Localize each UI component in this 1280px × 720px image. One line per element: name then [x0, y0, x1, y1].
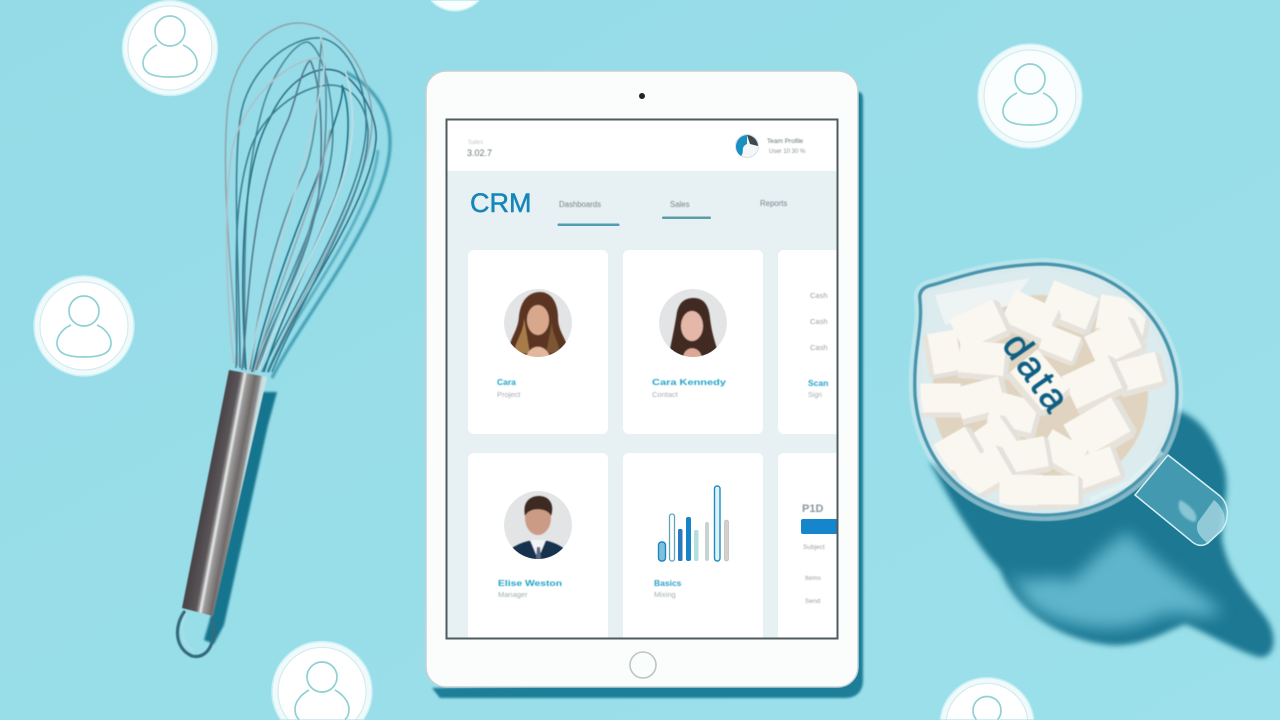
- cup shadow: [930, 410, 1274, 657]
- chart card: [623, 453, 763, 643]
- icon: customer avatar top right: [978, 44, 1082, 148]
- customer card 3: Manager: [498, 590, 528, 599]
- header profile icon: [736, 134, 758, 158]
- side card 2: [778, 453, 836, 638]
- side card 2: Items: [805, 575, 822, 582]
- side card 2: Subject: [803, 544, 825, 551]
- home button: [630, 652, 656, 678]
- cup glass and cubes: [915, 264, 1177, 515]
- measuring cup: [915, 264, 1274, 657]
- side card 1: Cash: [810, 291, 828, 300]
- icon: customer avatar bottom: [272, 641, 372, 720]
- bar chart: [658, 486, 728, 561]
- whisk handle shadow: [204, 392, 277, 644]
- side card 1: Scan: [808, 378, 828, 388]
- screen: [446, 120, 848, 643]
- sugar cubes: [920, 278, 1169, 511]
- portrait: woman with curly hair: [504, 289, 572, 358]
- whisk shadow: [268, 72, 390, 378]
- CRM logo: CRM: [470, 188, 532, 218]
- customer card 2: Cara Kennedy: [652, 377, 726, 387]
- camera: [639, 93, 645, 99]
- icon: customer avatar left: [34, 276, 134, 376]
- customer card 3: Elise Weston: [498, 578, 562, 588]
- screen header: Team Profile: [767, 138, 804, 145]
- customer card 1: Project: [497, 390, 521, 399]
- icon: customer avatar top left: [122, 0, 218, 96]
- screen nav: Sales: [670, 200, 690, 209]
- customer card 2: [623, 250, 763, 434]
- icon: customer avatar bottom right: [940, 678, 1034, 720]
- screen nav: Reports: [760, 199, 787, 208]
- side card 1: Cash: [810, 317, 828, 326]
- customer card 1: [468, 250, 608, 434]
- data label on cubes: data: [994, 325, 1079, 422]
- screen nav: Dashboards: [559, 200, 601, 209]
- whisk handle: [177, 370, 267, 657]
- customer card 3: [468, 453, 608, 643]
- portrait: woman with dark hair: [659, 289, 727, 358]
- cup handle: [1135, 455, 1227, 545]
- tablet: [426, 71, 863, 698]
- chart card: Mixing: [654, 590, 676, 599]
- screen header: [447, 120, 837, 171]
- customer card 2: Contact: [652, 390, 679, 399]
- light patch in the shadow: [1008, 532, 1222, 628]
- icon: customer avatar top edge: [431, 0, 479, 11]
- side card 1: Sign: [808, 392, 822, 399]
- tablet body: [426, 71, 858, 687]
- side card 2: Send: [805, 598, 821, 605]
- screen nav: [471, 193, 788, 226]
- screen header: Sales: [468, 140, 483, 146]
- portrait: man in suit: [504, 491, 572, 562]
- customer card 1: Cara: [497, 377, 516, 387]
- screen header: 3.02.7: [467, 148, 492, 158]
- chart card: Basics: [654, 578, 682, 588]
- side card 1: [778, 250, 836, 434]
- tablet shadow: [432, 90, 863, 698]
- side card 1: Cash: [810, 343, 828, 352]
- whisk: [177, 23, 390, 657]
- whisk wires: [225, 23, 376, 372]
- glass rim: [915, 264, 1177, 515]
- screen header: User 10 30 %: [769, 149, 806, 155]
- side card 2: P1D: [802, 503, 823, 515]
